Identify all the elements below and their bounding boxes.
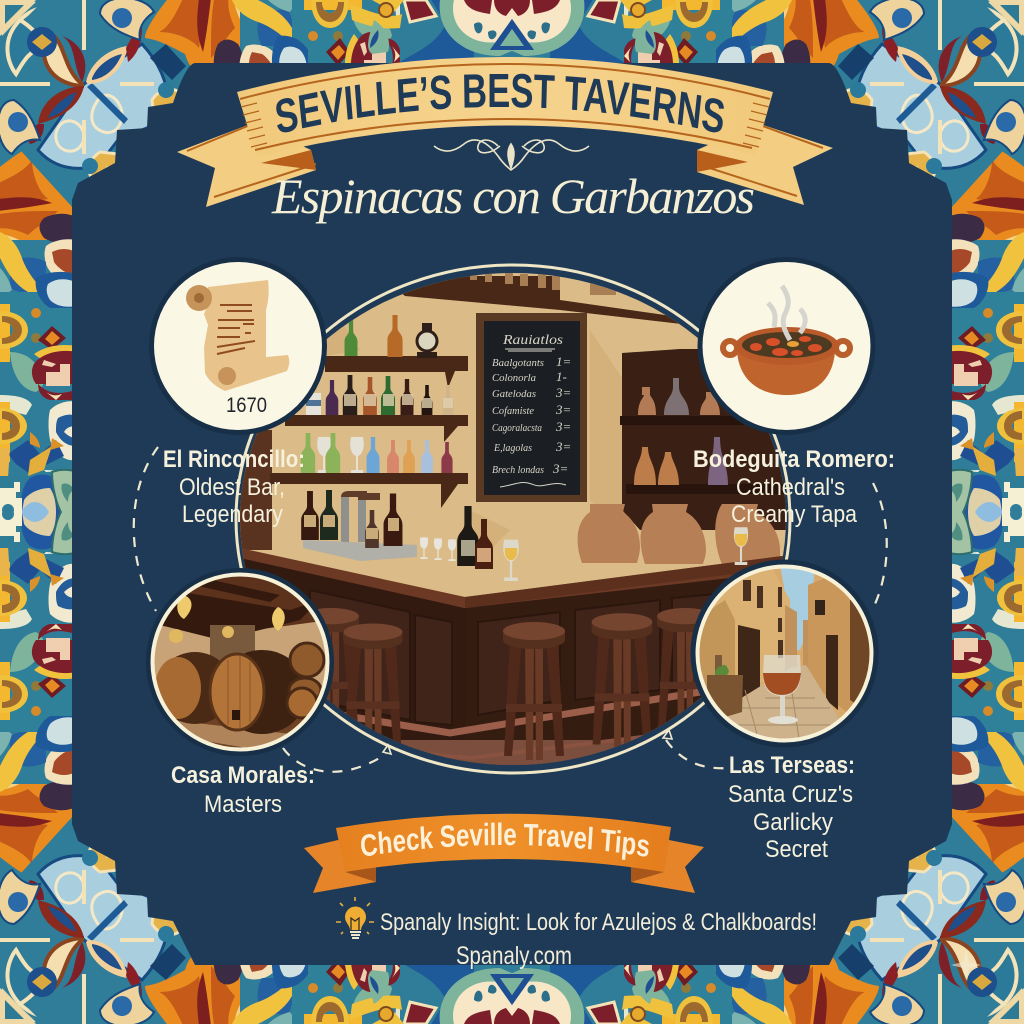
right cabinet — [620, 349, 800, 530]
label: El Rinconcillo: El Rinconcillo: — [163, 446, 305, 473]
label: Bodeguita Romero — [693, 446, 895, 528]
icon: scroll 1670 — [149, 257, 327, 435]
label: Las Terseas: Santa Cruz's — [728, 781, 853, 808]
chalkboard menu: Gatelodas — [492, 388, 536, 400]
chalkboard menu: 3= — [555, 439, 571, 454]
chalkboard menu — [476, 313, 587, 502]
label: El Rinconcillo: Oldest Bar, — [179, 474, 285, 501]
chalkboard menu: Baalgotants — [492, 357, 544, 369]
wall shelves — [270, 356, 468, 508]
chalkboard menu: Cofamiste — [492, 405, 534, 417]
chalkboard menu: 3= — [555, 402, 571, 417]
label: Las Terseas: Las Terseas: — [729, 752, 855, 779]
label: Casa Morales: Casa Morales: — [171, 762, 315, 789]
label: Bodeguita Romero: Cathedral's — [736, 474, 845, 501]
ornament flourish — [434, 140, 589, 170]
top shelf — [402, 273, 679, 324]
icon: alley with sherry glass — [690, 560, 880, 748]
website: Spanaly.com — [456, 942, 572, 970]
chalkboard menu: E,lagolas — [493, 442, 532, 454]
label: Casa Morales — [171, 762, 315, 818]
dashed connectors — [134, 447, 887, 772]
icon: barrel cellar — [146, 568, 334, 756]
chalkboard menu: 1- — [556, 369, 567, 384]
tavern bar scene — [230, 260, 800, 780]
label: Bodeguita Romero: Bodeguita Romero: — [693, 446, 895, 473]
chalkboard menu: 3= — [555, 385, 571, 400]
chalkboard menu: Cagoralacsta — [492, 422, 542, 434]
clay jars — [578, 504, 780, 564]
chalkboard menu: 3= — [555, 419, 571, 434]
bar counter — [240, 548, 800, 780]
title text: SEVILLE’S BEST TAVERNS — [276, 74, 724, 132]
chalkboard menu: 1= — [556, 354, 571, 369]
year: 1670 — [226, 394, 267, 417]
chalkboard menu: Colonorla — [492, 372, 536, 384]
call to action ribbon — [304, 814, 704, 893]
insight text: Spanaly Insight: Look for Azulejos & Chalkboards! — [380, 909, 817, 936]
label: El Rinconcillo: Legendary — [182, 501, 283, 528]
bottles on shelves — [301, 315, 453, 473]
subtitle: Espinacas con Garbanzos — [271, 168, 755, 224]
label: Las Terseas: Garlicky — [753, 809, 833, 836]
label: Bodeguita Romero: Creamy Tapa — [731, 501, 858, 528]
chalkboard menu: 3= — [552, 461, 568, 476]
arrowheads — [383, 730, 672, 754]
chalkboard menu: Rauiatlos — [502, 333, 564, 348]
bottles and glass on counter — [457, 506, 748, 581]
icon: clay pot — [698, 257, 876, 435]
navy central panel — [72, 63, 952, 965]
label: Las Terseas — [728, 752, 855, 863]
call to action text: Check Seville Travel Tips — [361, 822, 649, 860]
label: Casa Morales: Masters — [204, 791, 282, 818]
bar stools — [303, 608, 713, 760]
label: El Rinconcillo — [163, 446, 305, 528]
sparkle mark — [951, 950, 981, 980]
title ribbon — [177, 57, 833, 207]
taps and counter bottles — [301, 490, 456, 561]
icon: light bulb — [336, 897, 374, 938]
label: Las Terseas: Secret — [765, 836, 828, 863]
chalkboard menu: Brech londas — [492, 464, 544, 476]
